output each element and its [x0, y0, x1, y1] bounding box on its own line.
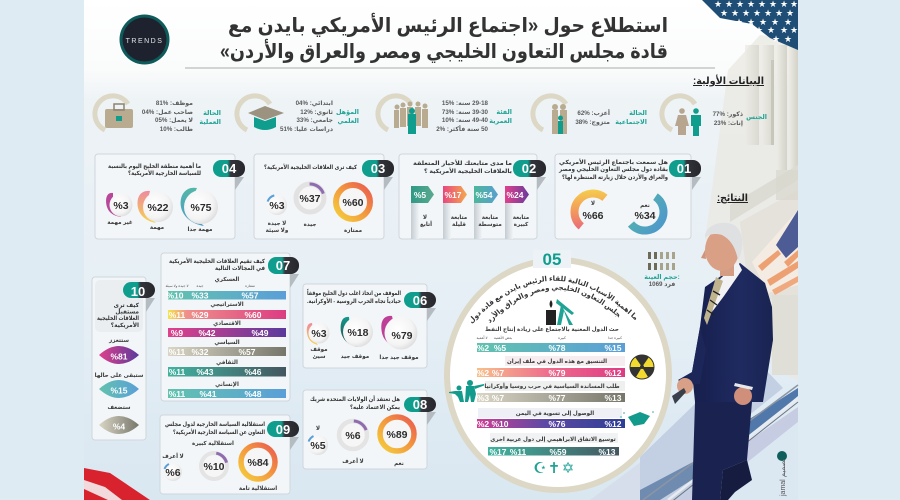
bubble: very important 75% [181, 188, 218, 233]
panel: question 01 [555, 154, 701, 239]
row: iran: التنسيق مع هذه الدول في ملف إيران [507, 359, 607, 365]
bar: cultural [168, 360, 286, 377]
question text: للسياسة الخارجية الأمريكية؟ [128, 169, 201, 177]
panel: question 10 [92, 277, 155, 440]
bar: strategic: الاستراتيجي [210, 302, 244, 308]
row: oil: لا أهمية [476, 335, 488, 340]
panel: question 07 [161, 253, 299, 401]
donut: complete 84%: استقلالية تامة [239, 486, 277, 492]
number tab 03: 03 [371, 161, 385, 176]
donut: excellent 60%: %60 [342, 197, 364, 209]
eye: remain 15%: ستبقى على حالها [95, 373, 144, 379]
question text: كيف تقيم العلاقات الخليجية الأمريكية [169, 257, 266, 265]
donut: neither 3%: ولا سيئة [266, 228, 289, 234]
bar: strategic [168, 302, 286, 320]
bar: military: جيدة [196, 284, 204, 288]
bar: political: %57 [238, 347, 256, 357]
number tab 06: 06 [413, 293, 427, 308]
number tab 02 [513, 160, 546, 190]
bar: political: %32 [191, 347, 209, 357]
US flag stars corner: ★ [767, 25, 775, 35]
US flag stars corner: ★ [720, 8, 728, 18]
flag: 24%: %24 [506, 190, 524, 200]
title: قادة مجلس التعاون الخليجي ومصر والعراق والأردن» [220, 38, 668, 64]
eye: weaken 4%: ستضعف [107, 405, 131, 411]
question text: بالعلاقات الخليجية الأمريكية ؟ [424, 167, 512, 175]
eye: strengthen 81%: %81 [110, 352, 128, 362]
donut: good 37%: جيدة [304, 222, 316, 228]
bar: military: %10 [166, 290, 184, 300]
flag: 24%: كبيرة [514, 221, 529, 228]
bar: military: العسكري [215, 276, 239, 283]
sample size [644, 252, 680, 288]
donut: large 10%: استقلالية كبيرة [192, 440, 234, 447]
demographics: gender: إناث: %23 [714, 120, 743, 127]
donut: no 66%: %66 [582, 210, 604, 222]
flag: 17%: قليلة [452, 222, 466, 228]
question text [97, 302, 140, 329]
US flag stars corner: ★ [784, 34, 792, 44]
question text [413, 159, 512, 175]
flag: 54%: متابعة [482, 215, 499, 221]
donut: neither 3%: %3 [269, 200, 285, 212]
donut: yes 34%: %34 [634, 210, 656, 222]
demographics: social status: الحالة [629, 110, 647, 117]
question text: استقلالية السياسة الخارجية لدول مجلس [165, 422, 265, 428]
demographics: age group: 50 سنة فأكثر: %2 [436, 125, 489, 133]
icon: family [552, 104, 567, 134]
US flag stars corner: ★ [742, 8, 750, 18]
icon: handshake [620, 411, 654, 426]
row: russia ukraine: %3 [477, 393, 489, 403]
number tab 04: 04 [222, 161, 237, 176]
US flag stars corner: ★ [753, 8, 761, 18]
number tab 09: 09 [276, 422, 290, 437]
US flag stars corner: ★ [735, 17, 743, 27]
bar: strategic: %11 [169, 310, 186, 320]
bubble: good 18% [341, 317, 373, 360]
aircraft stairs [590, 367, 798, 500]
eye: weaken 4% [99, 405, 139, 434]
donut: yes 89%: %89 [386, 429, 408, 441]
donut: yes 34% [619, 186, 671, 238]
row: abraham accords: %13 [598, 447, 616, 457]
donut: neither 3% [264, 192, 290, 234]
row: russia ukraine: %77 [548, 393, 566, 403]
question text: بقادة دول مجلس التعاون الخليجي ومصر [558, 167, 668, 173]
background photo area [84, 0, 798, 500]
flag: 54% [474, 186, 502, 239]
figure: president on stairs [672, 223, 773, 500]
panel: question 09 [160, 415, 299, 494]
question text: ما مدى متابعتك للأخبار المتعلقة [413, 159, 512, 167]
bubble: bad 3%: سيئ [313, 354, 326, 360]
row: oil: %78 [548, 343, 566, 353]
row: russia ukraine [477, 381, 625, 403]
demographics: age group: الفئة [496, 109, 512, 116]
row: yemen: %10 [491, 419, 509, 429]
icon: religious symbols: ☪ [533, 460, 547, 477]
title: استطلاع حول «اجتماع الرئيس الأمريكي بايدن مع [228, 12, 668, 38]
donut: unknown 6%: %6 [165, 467, 181, 479]
donut: excellent 60% [336, 185, 370, 234]
row: iran: %12 [604, 368, 622, 378]
row: yemen: %76 [548, 419, 566, 429]
donut: unknown 6%: لا أعرف [342, 457, 364, 465]
demographics: age group: 29-18 سنة: %15 [442, 100, 489, 107]
question text: كيف ترى العلاقات الخليجية الأمريكية؟ [264, 163, 358, 171]
heading: initial data: البيانات الأولية: [693, 74, 764, 87]
icon: religious symbols: ✝ [548, 460, 560, 477]
icon: crowd [394, 102, 428, 134]
curved heading: ما اهمية الأسباب التالية للقاء الرئيس بايدن مع قادة دول [470, 275, 636, 324]
demographics: education: ابتدائي: %04 [296, 100, 333, 107]
heading: results: النتائج: [717, 193, 748, 204]
question text: الموقف من اتخاذ اغلب دول الخليج موقفاً [307, 289, 401, 297]
row: russia ukraine: %13 [604, 393, 622, 403]
row: oil: بعض الأهمية [494, 335, 512, 340]
donut: unknown 6%: %6 [345, 430, 361, 442]
designer credit: jamal تصميم [780, 458, 787, 497]
number tab 02: 02 [522, 161, 536, 176]
bar: cultural: %43 [196, 367, 214, 377]
icon: oil barrel and pump [546, 299, 574, 325]
donut: no 5%: %5 [310, 440, 326, 452]
US flag stars corner: ★ [755, 25, 763, 35]
row: yemen: الوصول إلى تسوية في اليمن [516, 411, 594, 417]
number tab 01: 01 [677, 161, 691, 176]
question text: في المجالات التالية [215, 266, 265, 272]
number tab 04 [213, 160, 245, 190]
bar: strategic: %60 [244, 310, 262, 320]
row: yemen [477, 408, 625, 429]
panel: question 02 [399, 154, 546, 239]
demographics: age group: 49-40 سنة: %10 [442, 117, 489, 124]
donut: unknown 6%: لا أعرف [162, 452, 184, 460]
demographics: age group [378, 96, 512, 134]
US flag stars corner: ★ [772, 34, 780, 44]
flag: 5%: لا [423, 215, 427, 221]
question text: ما أهمية منطقة الخليج اليوم بالنسبة [108, 162, 201, 170]
row: iran: %79 [548, 368, 566, 378]
icon: people rows [648, 252, 675, 270]
US flag behind figure [752, 210, 798, 295]
bubble: bad 3% [307, 322, 330, 360]
row: oil: كبيرة [558, 336, 566, 340]
bar: economic: %9 [171, 328, 183, 338]
US flag stars corner: ★ [747, 17, 755, 27]
donut: large 10% [192, 440, 234, 481]
row: russia ukraine: %7 [492, 393, 504, 403]
number tab 07: 07 [276, 258, 290, 273]
icon: soldiers [449, 380, 484, 402]
question text: كيف ترى [114, 302, 140, 309]
icon: religious symbols [533, 460, 574, 477]
bubble: good 18%: %18 [347, 327, 369, 339]
eye: remain 15%: %15 [110, 386, 128, 396]
US flag stars corner: ★ [790, 25, 798, 35]
capitol building [705, 35, 798, 380]
donut: unknown 6% [161, 452, 185, 484]
question text [310, 395, 400, 411]
demographics: education: جامعي: %33 [296, 117, 333, 124]
bar: military: ممتازة [245, 284, 255, 288]
icon: radiation [630, 355, 654, 379]
bar: humanitarian: %41 [199, 389, 217, 399]
row: oil: كبيرة جدا [608, 336, 622, 340]
flag: 24% [505, 186, 530, 239]
curved heading: مجلس التعاون الخليجي ومصر والعراق والأردن [488, 285, 620, 323]
question text [558, 158, 668, 181]
row: oil: %5 [494, 343, 506, 353]
bubble: very good 79%: %79 [391, 330, 413, 342]
US flag stars corner: ★ [731, 8, 739, 18]
donut: neither 3%: لا جيدة [268, 221, 286, 227]
bar: cultural: %46 [244, 367, 262, 377]
donut: no 66%: لا [591, 201, 595, 207]
row: iran: %2 [477, 368, 489, 378]
bar: humanitarian: %11 [169, 389, 186, 399]
bubble: important 22% [138, 191, 173, 231]
icon: briefcase [105, 104, 133, 128]
question text [169, 257, 266, 272]
panel: question 04 [95, 154, 245, 239]
demographics: education: ثانوي: %12 [300, 109, 333, 116]
row: yemen: %2 [477, 419, 489, 429]
demographics: education: المؤهل [336, 109, 359, 116]
number tab 08: 08 [413, 397, 427, 412]
donut: excellent 60%: ممتازة [344, 228, 363, 234]
demographics: education: دراسات عليا: %51 [280, 126, 333, 133]
bar: humanitarian [168, 382, 286, 399]
title rule [185, 67, 715, 69]
bar: military: %57 [241, 290, 259, 300]
demographics: job status: طالب: %10 [160, 126, 193, 133]
panel: question 08 [303, 390, 436, 469]
US flag stars corner: ★ [764, 8, 772, 18]
icon: religious symbols: ✡ [562, 460, 574, 477]
demographics: job status: موظف: %81 [156, 100, 193, 107]
flag: 5%: أتابع [420, 220, 432, 228]
question text: هل سمعت باجتماع الرئيس الأمريكي [559, 158, 668, 166]
demographics: age group: العمرية [489, 118, 512, 125]
red flag strip [84, 468, 150, 500]
row: oil: حث الدول المعنية بالاجتماع على زيادة إنتاج النفط [485, 327, 619, 333]
bubble: bad 3%: موقف [310, 347, 328, 353]
question text: يمكن الاعتماد عليه؟ [350, 404, 400, 411]
bubble: very important 75%: مهمة جدا [187, 227, 213, 233]
row: iran [477, 356, 625, 378]
demographics: job status [95, 96, 221, 133]
flag: 54%: %54 [475, 190, 493, 200]
panel: question 06 [303, 284, 436, 368]
donut: yes 89%: نعم [394, 461, 404, 467]
bubble: important 22%: مهمة [150, 225, 165, 231]
donut: no 66% [567, 186, 619, 238]
bubble: important 22%: %22 [147, 202, 169, 214]
demographics: gender: ذكور: %77 [713, 111, 743, 118]
row: abraham accords: %11 [510, 447, 527, 457]
US flag stars corner: ★ [784, 17, 792, 27]
bar: economic [168, 321, 286, 338]
flag: 17%: متابعة [451, 215, 468, 221]
US flag stars corner: ★ [786, 8, 794, 18]
bar: economic: %42 [198, 328, 216, 338]
donut: complete 84% [239, 445, 277, 492]
demographics: social status: متزوج: %38 [575, 119, 610, 126]
flag: 5% [411, 186, 434, 239]
bar: humanitarian: الإنساني [215, 382, 239, 388]
bar: strategic: %29 [191, 310, 209, 320]
bubble: not important 3% [106, 193, 133, 226]
number tab 01 [669, 160, 701, 190]
donut: no 5%: لا [316, 426, 320, 432]
demographics: social status [533, 96, 647, 134]
panel: question 03 [254, 154, 394, 239]
row: russia ukraine: طلب المساندة السياسية في حرب روسيا وأوكرانيا [484, 382, 620, 390]
circle panel: question 05 [444, 250, 672, 493]
bar: political: السياسي [214, 340, 240, 346]
demographics: age group: 39-30 سنة: %73 [442, 109, 489, 116]
bubble: good 18%: موقف جيد [341, 354, 370, 360]
flag: 24%: متابعة [513, 215, 530, 221]
demographics: social status: الاجتماعية [615, 119, 647, 126]
logo: TRENDS: TRENDS [126, 38, 163, 45]
number 05: 05 [543, 250, 561, 269]
bubble: very good 79%: موقف جيد جدا [379, 355, 419, 361]
row: abraham accords [488, 433, 619, 457]
title [220, 12, 668, 64]
bar: military [165, 276, 286, 300]
bar: political [168, 340, 286, 357]
row: oil [476, 327, 625, 353]
demographics: education: العلمي [337, 118, 359, 125]
bar: economic: الاقتصادي [213, 321, 241, 327]
eye: remain 15% [95, 373, 144, 398]
bar: humanitarian: %48 [244, 389, 262, 399]
question text: هل تعتقد أن الولايات المتحدة شريك [310, 395, 400, 403]
question text [307, 289, 401, 305]
row: oil: %15 [604, 343, 622, 353]
US flag stars corner: ★ [775, 8, 783, 18]
donut: no 5% [305, 426, 331, 458]
demographics: job status: لا يعمل: %05 [155, 117, 193, 124]
number tab 10: 10 [131, 284, 145, 299]
donut: complete 84%: %84 [247, 457, 269, 469]
flag: 17%: %17 [444, 190, 462, 200]
logo: TRENDS [120, 14, 170, 64]
bubble: very important 75%: %75 [190, 202, 212, 214]
bar: political: %11 [169, 347, 186, 357]
designer credit [777, 451, 787, 497]
question text [108, 162, 201, 177]
bar: economic: %49 [251, 328, 269, 338]
eye: strengthen 81% [99, 338, 139, 364]
eye: weaken 4%: %4 [113, 422, 125, 432]
row: abraham accords: توسيع الاتفاق الابراهيمي إلى دول عربية اخرى [490, 437, 616, 443]
demographics: job status: العملية [199, 119, 221, 126]
US flag stars corner [702, 0, 798, 50]
demographics: social status: أعزب: %62 [577, 109, 610, 117]
bubble: very good 79% [379, 316, 419, 361]
US flag stars corner: ★ [771, 17, 779, 27]
bubble: not important 3%: غير مهمة [107, 220, 133, 226]
question text: التعاون عن السياسة الخارجية الأمريكية؟ [173, 428, 265, 436]
row: abraham accords: %17 [489, 447, 507, 457]
donut: large 10%: %10 [203, 461, 225, 473]
sample size: حجم العينة: [644, 274, 680, 281]
question text: حيادياً تجاه الحرب الروسية - الأوكرانية. [307, 297, 401, 305]
donut: yes 34%: نعم [640, 203, 650, 209]
bubble: not important 3%: %3 [113, 200, 129, 212]
bar: military: %33 [191, 290, 209, 300]
flag: 54%: متوسطة [478, 222, 502, 228]
US flag stars corner: ★ [780, 25, 788, 35]
bar: cultural: الثقافي [216, 360, 238, 366]
row: oil: %2 [477, 343, 489, 353]
row: iran: %7 [492, 368, 504, 378]
demographics: education [237, 96, 359, 133]
icon: man and woman [675, 108, 701, 136]
donut: good 37% [296, 184, 324, 228]
question text [165, 422, 265, 436]
eye: strengthen 81%: ستتعزز [108, 338, 129, 344]
flag: 17% [443, 186, 468, 239]
demographics: job status: الحالة [203, 110, 221, 117]
demographics: gender: الجنس [746, 114, 767, 121]
row: abraham accords: %59 [549, 447, 567, 457]
number tab 07 [268, 257, 299, 288]
bar: cultural: %11 [169, 367, 186, 377]
donut: unknown 6% [338, 420, 368, 465]
sample size: 1069 فرد [649, 281, 675, 288]
number tab 10 [123, 282, 155, 312]
demographics: job status: صاحب عمل: %04 [142, 109, 193, 116]
question text: العلاقات الخليجية [97, 316, 139, 322]
question text: مستقبل [115, 310, 139, 316]
row: yemen: %12 [604, 419, 622, 429]
demographics: gender [662, 96, 767, 136]
icon: graduation cap [248, 106, 284, 130]
donut: yes 89% [380, 417, 414, 467]
flag: 5%: %5 [414, 190, 426, 200]
bubble: bad 3%: %3 [311, 328, 327, 340]
donut: good 37%: %37 [299, 193, 321, 205]
question text: الأمريكية؟ [111, 321, 139, 329]
bar: military: لا جيدة ولا سيئة [165, 284, 189, 288]
US flag stars corner: ★ [759, 17, 767, 27]
question text: والعراق والأردن خلال زيارته المنتظرة لها؟ [562, 173, 668, 181]
